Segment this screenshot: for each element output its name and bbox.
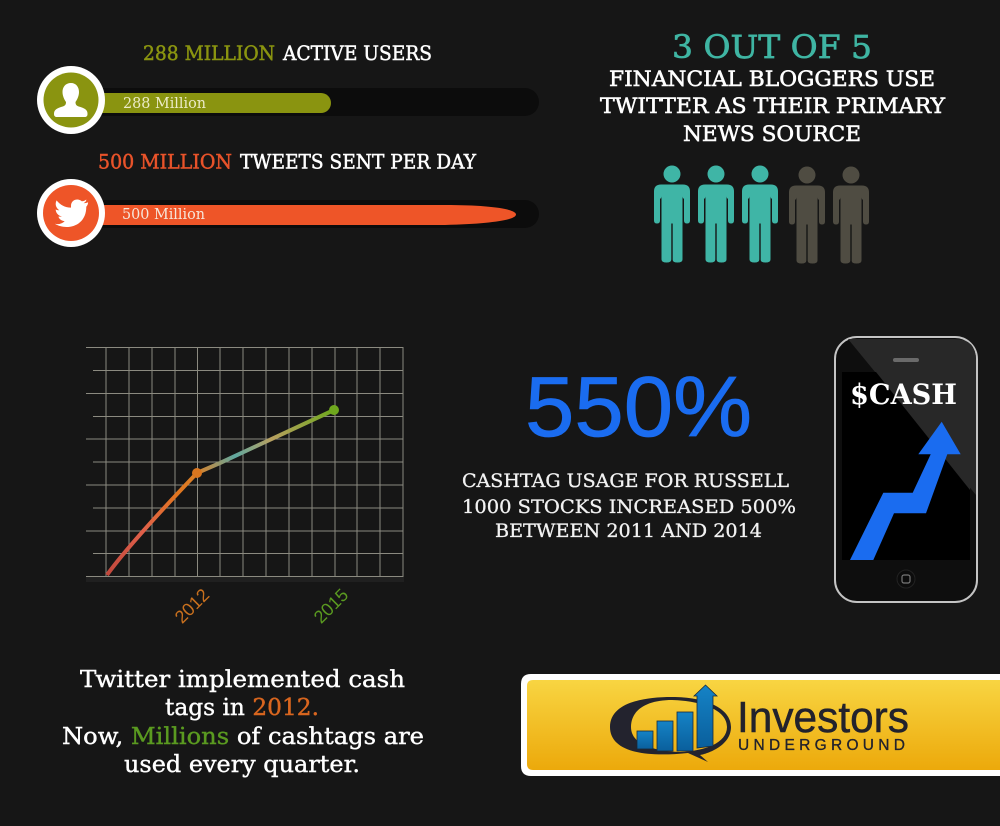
text block: twitter implemented cash tags: Twitter implemented cash <box>80 667 405 693</box>
axis label: 2012: 2012 <box>171 585 213 627</box>
data point: 2015 <box>329 405 339 415</box>
text block: cashtag usage: CASHTAG USAGE FOR RUSSELL <box>462 470 789 492</box>
progress bar: 288 million <box>90 88 539 116</box>
data point: 2012 <box>192 468 202 478</box>
heading: 3 out of 5: 3 OUT OF 5 <box>672 28 872 66</box>
icon: twitter bird badge <box>37 179 105 247</box>
heading: 288 million active users: ACTIVE USERS <box>282 41 432 65</box>
text block: bloggers statement: NEWS SOURCE <box>683 122 861 146</box>
data line <box>107 410 334 575</box>
text block: bloggers statement: FINANCIAL BLOGGERS USE <box>609 67 935 91</box>
text block: bloggers statement <box>600 67 946 146</box>
text block: twitter implemented cash tags: Now, Millions of cashtags are <box>62 724 424 750</box>
heading: 500 million tweets sent per day: 500 MILLION <box>98 150 232 174</box>
logo mark: speech bubble and bars <box>610 685 731 762</box>
text block: twitter implemented cash tags: tags in 2012. <box>165 695 319 721</box>
progress bar: 500 million: 500 Million <box>122 205 205 223</box>
progress bar: 288 million: 288 Million <box>123 94 206 112</box>
panel: cashtag usage stat <box>462 360 796 542</box>
progress bar: 500 million <box>90 200 539 228</box>
text block: twitter implemented cash tags <box>62 667 424 778</box>
text block: cashtag usage <box>462 470 796 542</box>
panel: tweets per day <box>37 150 539 247</box>
heading: 288 million active users: 288 MILLION <box>143 41 275 65</box>
icon: phone with rising arrow <box>835 337 977 602</box>
text block: bloggers statement: TWITTER AS THEIR PRIMARY <box>600 94 946 118</box>
logo wordmark: Underground: UNDERGROUND <box>738 737 905 754</box>
panel: financial bloggers <box>600 28 946 264</box>
pictogram: five people, three highlighted <box>654 166 869 264</box>
arrow: rising <box>850 422 961 560</box>
heading: 500 million tweets sent per day <box>98 150 477 174</box>
heading: 288 million active users <box>143 41 432 65</box>
label: $CASH: $CASH <box>850 378 957 411</box>
icon: user badge <box>37 66 105 134</box>
panel: active users <box>37 41 539 134</box>
text block: cashtag usage: BETWEEN 2011 AND 2014 <box>495 520 762 542</box>
heading: 500 million tweets sent per day: TWEETS SENT PER DAY <box>240 150 477 174</box>
banner: investors underground <box>521 674 1000 776</box>
logo wordmark: Investors: Investors <box>737 693 909 742</box>
big number: 550%: 550% <box>525 360 752 455</box>
text block: cashtag usage: 1000 STOCKS INCREASED 500% <box>462 496 796 518</box>
axis label: 2015: 2015 <box>310 585 352 627</box>
line chart: cashtag growth <box>86 347 404 627</box>
text block: twitter implemented cash tags: used every quarter. <box>124 752 360 778</box>
